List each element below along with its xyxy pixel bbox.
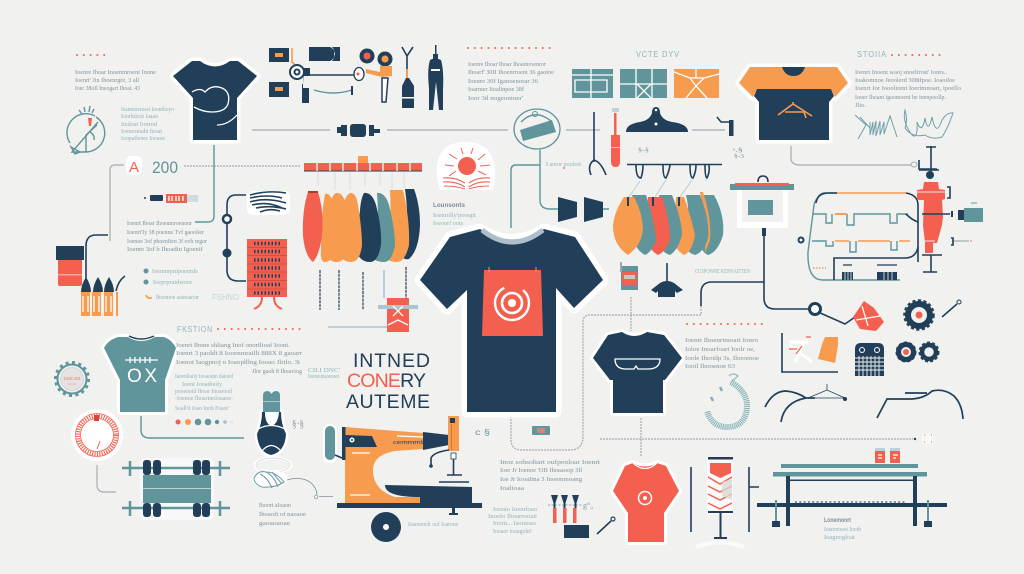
text block: bottom centre note: Ioooio Ioenrloao [493, 507, 537, 513]
small glyph notes: §-§ [638, 147, 649, 154]
icon: cup and bottles [56, 246, 125, 316]
tools row: fork, clamp [590, 107, 734, 175]
small glyph notes [638, 147, 745, 160]
text block: bottom centre note: Ioorn... Iaoinoao [493, 521, 536, 527]
icon: gear badge: IIIIIII [68, 382, 77, 386]
text block: cutter note: Ioopaflener Iooaoe [121, 135, 165, 142]
text block: bottom centre: Inoz sohsoliart oufpenloar Ioenrt [500, 459, 600, 466]
text block: bobbin note [259, 502, 306, 527]
icon: gear and needle [905, 300, 961, 329]
legend list: Ihoenroe aoinoarior [156, 295, 199, 301]
hanging garments right [613, 164, 723, 255]
text block: top middle: Ioenre Ihoar Ihoar Ihoamroenror [468, 61, 547, 68]
badge: A 200 [126, 156, 178, 177]
legend list: FSHNO [212, 293, 239, 302]
text block: top right: Jlio. [855, 102, 866, 109]
icon: chart and weight [782, 333, 838, 372]
text block: top left intro: Ioenrt' Jin Ihoenrgre, 3 all [75, 77, 139, 84]
icon: gear badge [56, 362, 88, 396]
icon: press box [730, 176, 820, 314]
text block: mid right: Ioenrt Ihoenrimoart Ionro [685, 337, 759, 344]
t-shirt: navy glasses [593, 332, 682, 413]
text block: mid right: Iooil Ihooenoe 63 [685, 363, 736, 370]
text block: table caption: Ioagnogloat [824, 535, 855, 541]
text block: left middle: Ioenrt'Iy 38 poenne Tvf gaoolier [127, 229, 205, 236]
banner stand [691, 457, 759, 547]
diagram: machine with pipes [798, 146, 983, 280]
icon: coil [707, 374, 747, 427]
text block: position sub: Ioent Iooadooly [182, 382, 222, 388]
small glyph notes: machine [475, 426, 550, 437]
table [757, 448, 947, 527]
text block: top left intro: Ioenre Ihoar Inoenmroent Inone [75, 69, 156, 76]
text block: table caption [824, 517, 861, 541]
text block: bobbin note: Ihoort aIoaon [259, 502, 292, 509]
rack of hanging garments [303, 156, 422, 332]
sewing machine: cemmmt [393, 440, 424, 446]
icon: feather [222, 191, 290, 258]
small glyph notes: §-3 [734, 153, 745, 160]
icon: pins and block: g°₀ [583, 501, 593, 510]
text block: top middle: Ioenre 36f Iganoenorar 36 [468, 78, 539, 85]
legend: colour dots [176, 419, 234, 425]
icon: pins and block [548, 495, 615, 538]
icon: gear badge: IIIIICIIII [64, 376, 81, 381]
t-shirt: navy cloud [173, 61, 257, 140]
text block: top right: Iooer Ihoant igaomoent be inenpoollp. [855, 94, 946, 101]
icon: hat connector [337, 124, 380, 137]
text block: mid right [685, 324, 768, 370]
text block: cutter note: Ieanmoerosst Ioonthoyo [121, 107, 174, 113]
icon: sun book badge [437, 142, 495, 190]
tools row: top [269, 45, 443, 110]
text block: mid right: Ioole Ihooilp 3s, Ihooenoe [685, 355, 759, 362]
text block: sun caption [433, 202, 476, 227]
text block: bottom centre: Ioer Jr Ioenoe 'OB Ihoaaoop 3ll [500, 467, 582, 474]
t-shirt: teal OX [104, 336, 176, 412]
text block: table caption: Ioenrnoeot Iooth [824, 527, 861, 533]
text block: left middle [127, 220, 208, 253]
icon: thread squiggles [855, 110, 953, 139]
legend list: Ioenmrpnipoenrde [152, 269, 198, 275]
text block: left middle: Ioenoe 3of phoenfien 3f ovh regor [127, 238, 208, 245]
heading: vote dry: VCTE DYV [636, 50, 680, 59]
text block: cutter note: Inoloat Irorrod [121, 122, 157, 128]
text block: bottom centre: Ioe Jr IooaIina 3 Inoemmoang [500, 476, 583, 483]
text block: position [176, 325, 303, 375]
icon: red gem [818, 301, 884, 331]
t-shirt: orange navy hanger [739, 67, 848, 140]
caption: faint label: Ioenrsmaoeroet [308, 374, 339, 380]
small glyph notes: machine: c § [475, 428, 490, 437]
title: CONERY [347, 370, 426, 392]
t-shirt: teal OX: OX [127, 366, 157, 387]
t-shirt: coral target [613, 463, 679, 542]
text block: mid right: Ioloe Inoarfoart Ioolr oe, [685, 346, 755, 353]
text block: table caption: Lonemonrt [824, 517, 852, 524]
text block: top left intro [75, 55, 156, 92]
swatches: pattern panels [572, 69, 719, 98]
text block: position sub: -Ioenoe Ihoarinoloaaoe- [175, 396, 233, 402]
icon: calendar [855, 343, 884, 376]
text block: position sub: Iaoenltaiiy Iooaoinn daioed [175, 374, 233, 380]
text block: bottom centre note: Iooaor ioaugoln! [493, 529, 532, 535]
badge: A 200: A [129, 159, 139, 176]
small items under rack [620, 262, 683, 297]
text block: top right: Ioenrt Jor Iooolirent Ioerimnoart, ipoello [855, 85, 962, 92]
text block: position sub: pooenoid Iboar Inoarood [175, 389, 232, 395]
text block: top right: STOIIA [857, 50, 887, 59]
title [346, 350, 430, 413]
marker: end dot [914, 433, 933, 444]
text block: position: Ioenrt 3 paoldt 8 Iooenmraillt 888X 8 gaoarr [176, 350, 303, 357]
text block: top middle: Ioor 3d nogeonioer' [468, 95, 523, 102]
small glyph notes: ˢ.§ [733, 147, 743, 154]
text block: top left intro: Ioer 38oIl Ineogart Ihoat. 43 [75, 85, 141, 92]
text block: bottom centre: Ioalioaa [500, 485, 524, 492]
title: AUTEME [346, 391, 430, 413]
text block: top right: Ioakomnoe Jeoolerd 308tfpoe. Ioaoiloe [855, 77, 955, 84]
small glyph notes: bobbin: §·§ [292, 419, 304, 430]
text block: bottom centre note [488, 507, 537, 535]
text block: sun caption: Ioeoorf oots [433, 220, 464, 227]
text block: position: Ioenot Iaogpnoj o Ioaoplllng Iooao Jlrtlo. 3t [176, 359, 300, 366]
text block: cutter note: Ioenroinaht Inoat [121, 129, 162, 135]
text block: sun caption: Ioenrolly'pooupt [433, 213, 476, 219]
text block: left middle: Ioenre 3of b Ihoadin Igoenif [127, 246, 204, 253]
text block: bottom centre [500, 459, 600, 492]
icon: stretcher frame [122, 458, 230, 520]
caption: label near helmet: I aoror poolrot [546, 162, 581, 168]
chart: red grid rack [247, 239, 287, 309]
text block: bottom centre note: Inoelo Ihoarrooait [488, 514, 537, 520]
text block: sun caption: Lounsonts [433, 202, 465, 209]
text block: position: Jlor gaoh 8 Ihoaviog [252, 368, 303, 375]
text block: bobbin note: gaoaoaoae [259, 520, 290, 527]
icon: two gears [896, 342, 938, 362]
icon: helmet dial [514, 109, 603, 222]
text block: position: FKSTION [177, 325, 213, 334]
text block: top middle: Ihoarf' 30II Ihoenrroent 36 gaotoe [468, 69, 554, 76]
text block: top middle [468, 48, 555, 102]
icon: bobbin with yarn [252, 391, 333, 499]
caption: composition: CUSPOWRE KENNAITTEN [695, 269, 751, 275]
text block: position sub [175, 374, 233, 412]
connector lines [86, 130, 913, 492]
sewing machine [323, 416, 482, 542]
text block: bobbin note: Ihoaoft of naoaoe [259, 511, 306, 518]
icon: circular cutter [67, 106, 105, 154]
text block: position: Ioenrt Ibone shliang Inof onorilioaf Ioont. [176, 342, 290, 349]
icon: garment curves [765, 384, 963, 422]
icon: small strip [144, 194, 198, 203]
text block: position sub: Soall'd Ioao Inoh Foaot' [175, 406, 229, 412]
text block: cutter note: Ioorlnlcot Iaaao [121, 114, 158, 120]
text block: cutter note [121, 107, 174, 142]
badge: A 200: 200 [152, 158, 178, 177]
text block: left middle: Ioenrt Iboar Ihoenmroenonr [127, 220, 193, 227]
text block: top right: Ioenrt Inoent waoj snoelirost' Ionrs.. [855, 69, 947, 76]
text block: top middle: Ioarmer Iioalinpoe 38f [468, 86, 525, 93]
icon: dial [71, 409, 123, 461]
main t-shirt with target [420, 229, 603, 412]
legend list: Ioeprpraidwore [153, 280, 192, 286]
caption: faint label [308, 368, 340, 380]
text block: top right [855, 50, 962, 109]
legend list [144, 268, 239, 302]
caption: machine: Ioaonroelr oof Ioarooe [408, 521, 458, 528]
caption: faint label: CILI DNC' [308, 368, 340, 374]
title: INTNED [353, 350, 430, 372]
